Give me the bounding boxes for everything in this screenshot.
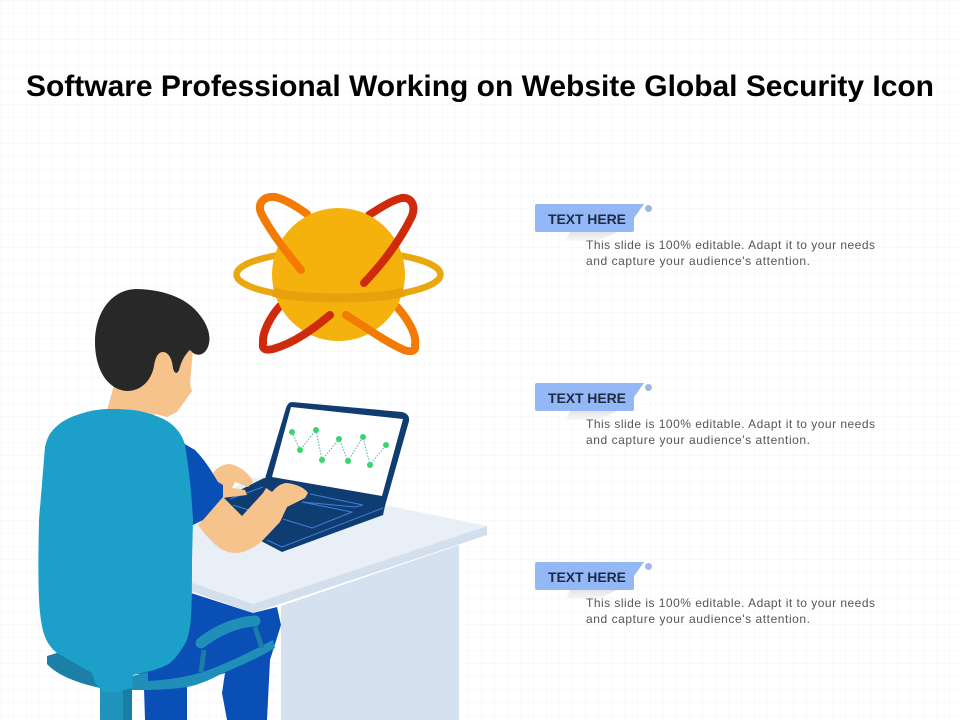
description: [586, 596, 875, 626]
icon: global security planet: [236, 197, 440, 351]
desk: [190, 477, 487, 720]
label tag: [535, 383, 644, 411]
description: and capture your audience's attention.: [586, 254, 810, 268]
description: [586, 417, 875, 447]
label shadow: [566, 232, 617, 241]
label shadow: [566, 590, 617, 599]
panel: item 2: [535, 383, 875, 447]
person: [95, 289, 308, 720]
desk top: [190, 477, 487, 604]
laptop screen: [272, 407, 403, 496]
chair back: [38, 409, 193, 692]
keyboard lines: [230, 487, 383, 547]
chair post: [100, 688, 132, 720]
planet band: [273, 292, 404, 298]
far hand: [213, 464, 253, 498]
label text: TEXT HERE: [548, 211, 626, 227]
label dot: [645, 384, 652, 391]
chair seat edge: [47, 652, 100, 688]
chair: [38, 409, 275, 720]
label shadow: [566, 411, 617, 420]
label tag: [535, 204, 644, 232]
planet ring back: [236, 250, 440, 298]
chair armrest: [201, 621, 255, 643]
description: This slide is 100% editable. Adapt it to your needs: [586, 238, 875, 252]
laptop lid: [264, 402, 409, 510]
label text: TEXT HERE: [548, 569, 626, 585]
legs: [135, 592, 281, 720]
hair: [95, 289, 209, 391]
line chart on screen: [289, 427, 389, 468]
description: This slide is 100% editable. Adapt it to your needs: [586, 417, 875, 431]
chair arm posts: [201, 627, 262, 672]
title: Software Professional Working on Website Global Security Icon: [26, 70, 934, 103]
chair arm rail: [132, 640, 275, 690]
label dot: [645, 563, 652, 570]
description: This slide is 100% editable. Adapt it to your needs: [586, 596, 875, 610]
laptop base: [222, 478, 385, 552]
panel: item 1: [535, 204, 875, 268]
description: and capture your audience's attention.: [586, 612, 810, 626]
orbit front segments: [260, 197, 415, 351]
desk edge: [190, 526, 487, 613]
laptop: [222, 402, 409, 552]
planet sphere: [272, 208, 405, 341]
label dot: [645, 205, 652, 212]
description: [586, 238, 875, 268]
label tag: [535, 562, 644, 590]
neck and face: [107, 345, 193, 425]
panel: item 3: [535, 562, 875, 626]
near arm: [198, 483, 308, 553]
orbit back segments: [263, 197, 415, 345]
shirt sleeve: [183, 443, 223, 525]
label text: TEXT HERE: [548, 390, 626, 406]
description: and capture your audience's attention.: [586, 433, 810, 447]
desk leg: [281, 545, 459, 720]
